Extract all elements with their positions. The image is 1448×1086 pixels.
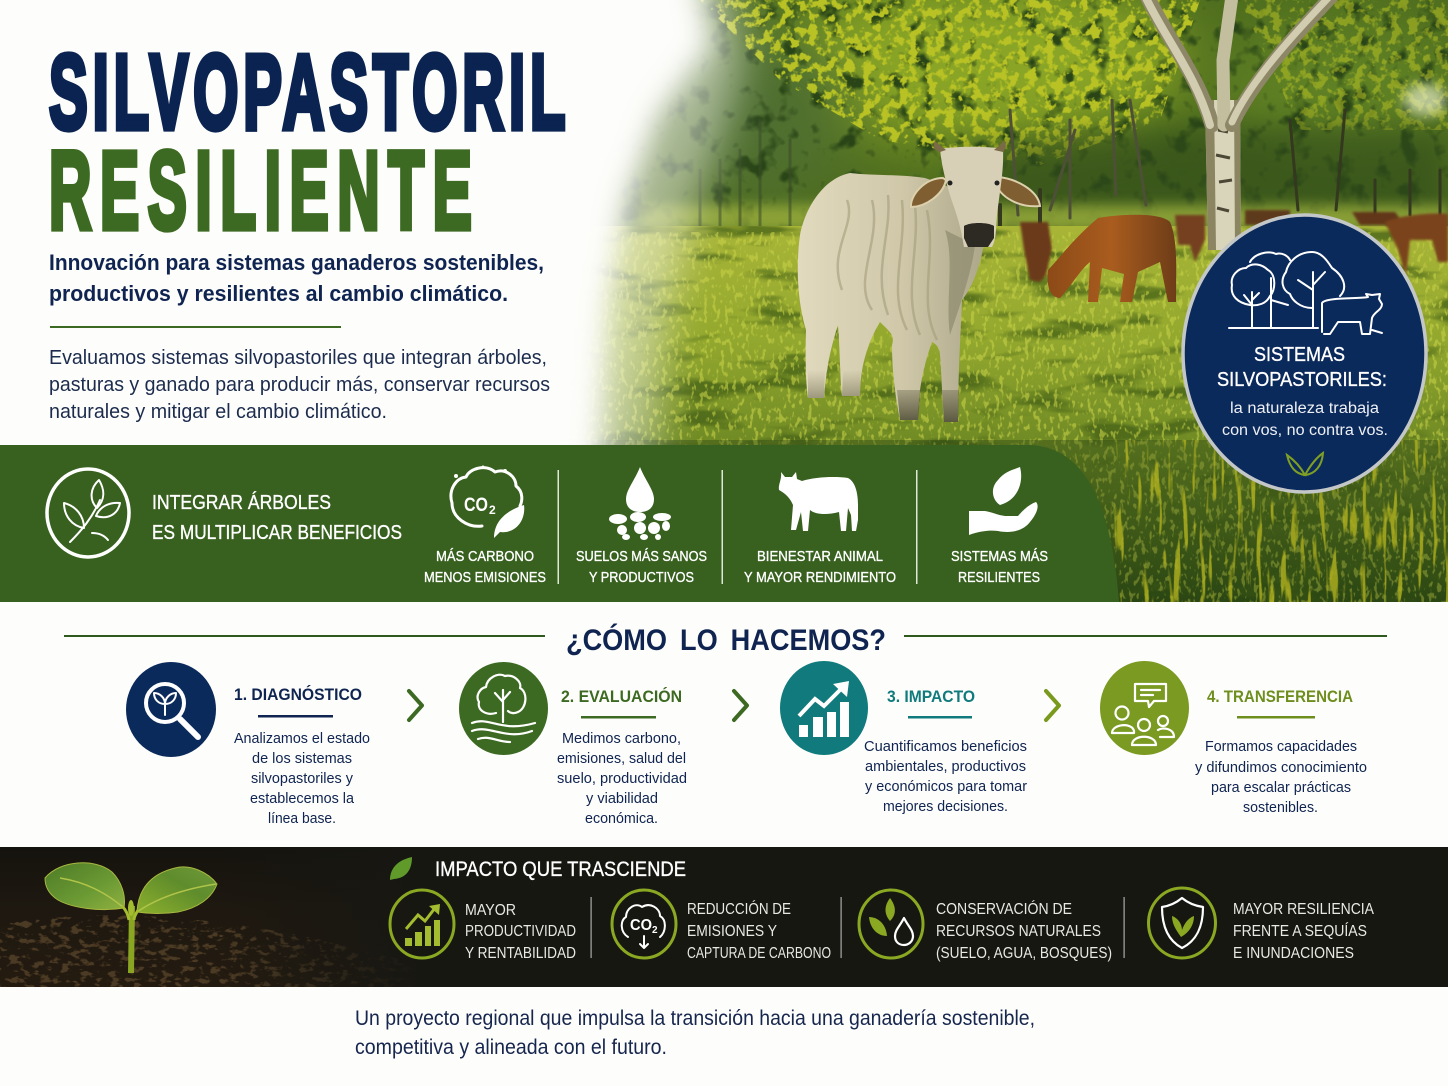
- step text: emisiones, salud del: [557, 751, 686, 767]
- benefit: soil label: SUELOS MÁS SANOS: [576, 548, 707, 565]
- band heading: ES MULTIPLICAR BENEFICIOS: [152, 522, 402, 544]
- impact 2: [612, 890, 831, 962]
- benefit: resilience label: SISTEMAS MÁS: [951, 548, 1048, 565]
- step 4: transferencia: [1100, 661, 1367, 816]
- benefit: resilience label: RESILIENTES: [958, 569, 1040, 586]
- step heading: 3. IMPACTO: [887, 687, 975, 706]
- step text: y viabilidad: [586, 791, 658, 807]
- step text: de los sistemas: [252, 751, 352, 767]
- impact 1: [390, 890, 576, 962]
- benefit: soil label: [576, 548, 707, 586]
- benefit: resilience label: [951, 548, 1048, 586]
- step text: Formamos capacidades: [1205, 739, 1357, 755]
- panel: benefits band: [0, 445, 1119, 602]
- impact text: EMISIONES Y: [687, 923, 777, 940]
- impact text: FRENTE A SEQUÍAS: [1233, 921, 1367, 940]
- impact text: REDUCCIÓN DE: [687, 899, 791, 918]
- impact text: [687, 899, 831, 962]
- icon: tree and land: [459, 662, 548, 755]
- arrow: [409, 691, 422, 720]
- intro paragraph: Evaluamos sistemas silvopastoriles que integran árboles,: [49, 347, 547, 369]
- background brown cattle: [1020, 210, 1448, 282]
- right leaf: [137, 867, 217, 914]
- title: [49, 34, 570, 252]
- icon: hand holding leaf: [969, 467, 1038, 535]
- subtitle: productivos y resilientes al cambio climático.: [49, 281, 508, 306]
- step text: [234, 731, 370, 827]
- icon: trees and cow outline: [1229, 252, 1382, 334]
- step text: [864, 739, 1027, 815]
- step text: económica.: [585, 811, 658, 827]
- sky gaps: [1403, 84, 1447, 116]
- white zebu cow: [798, 140, 1040, 422]
- impact text: MAYOR RESILIENCIA: [1233, 901, 1374, 918]
- impact text: CAPTURA DE CARBONO: [687, 945, 831, 962]
- tree canopy backdrop: [604, 0, 1448, 226]
- badge title: [1217, 344, 1387, 391]
- icon: CO2 cloud with arrow: CO: [630, 917, 652, 934]
- impact text: (SUELO, AGUA, BOSQUES): [936, 945, 1112, 962]
- step 3: impacto: [780, 661, 1027, 815]
- distant bright field band: [640, 205, 1448, 231]
- subtitle: [49, 250, 544, 306]
- title: RESILIENTE: [49, 129, 480, 252]
- step text: silvopastoriles y: [251, 771, 354, 787]
- badge tagline: [1222, 400, 1388, 439]
- icon: CO2 cloud with leaf: CO: [464, 495, 488, 516]
- icon: growth bars: [390, 890, 454, 958]
- panel: impact band: [0, 847, 1448, 987]
- step text: y difundimos conocimiento: [1195, 760, 1367, 776]
- icon: water drop over soil: [609, 467, 671, 540]
- background tree trunks: [700, 100, 1440, 236]
- icon: CO2 cloud with arrow: [612, 890, 676, 958]
- icon: magnifier with sprout: [126, 662, 216, 757]
- badge tagline: con vos, no contra vos.: [1222, 422, 1388, 439]
- closing statement: [355, 1007, 1035, 1059]
- impact text: [936, 899, 1112, 962]
- brown cow grazing: [1048, 215, 1176, 302]
- step text: mejores decisiones.: [883, 799, 1008, 815]
- section heading: como lo hacemos: ¿CÓMO LO HACEMOS?: [566, 623, 886, 657]
- badge: sistemas silvopastoriles: [1183, 215, 1426, 492]
- impact text: PRODUCTIVIDAD: [465, 923, 576, 940]
- badge tagline: la naturaleza trabaja: [1230, 400, 1379, 417]
- band heading: IMPACTO QUE TRASCIENDE: [435, 858, 686, 881]
- icon: cow: [779, 472, 858, 531]
- benefit: animal label: [744, 548, 896, 586]
- step text: [557, 731, 687, 827]
- hero photo: cattle grazing under trees: [582, 0, 1448, 602]
- intro paragraph: [49, 347, 550, 423]
- impact text: [1233, 901, 1374, 962]
- step text: y económicos para tomar: [865, 779, 1027, 795]
- icon: shield with leaf: [1148, 888, 1216, 958]
- benefit: animal label: BIENESTAR ANIMAL: [757, 548, 883, 565]
- step text: para escalar prácticas: [1211, 780, 1351, 796]
- icon: CO2 cloud with leaf: [451, 466, 524, 538]
- closing statement: competitiva y alineada con el futuro.: [355, 1036, 667, 1059]
- impact text: RECURSOS NATURALES: [936, 923, 1101, 940]
- arrow: [1046, 691, 1059, 720]
- step heading: 1. DIAGNÓSTICO: [234, 685, 362, 704]
- step text: establecemos la: [250, 791, 355, 807]
- intro paragraph: pasturas y ganado para producir más, conservar recursos: [49, 374, 550, 396]
- step text: Analizamos el estado: [234, 731, 370, 747]
- head: [940, 147, 1003, 247]
- icon: people with speech bubble: [1100, 661, 1189, 755]
- impact 3: [859, 890, 1112, 962]
- step text: sostenibles.: [1243, 800, 1318, 816]
- icon: sprout: [1287, 453, 1323, 475]
- shaded understory: [960, 126, 1448, 222]
- impact 4: [1148, 888, 1374, 962]
- impact text: MAYOR: [465, 902, 516, 919]
- title: SILVOPASTORIL: [49, 34, 570, 152]
- step text: [1195, 739, 1367, 816]
- closing statement: Un proyecto regional que impulsa la transición hacia una ganadería sostenible,: [355, 1007, 1035, 1030]
- badge title: SISTEMAS: [1254, 344, 1345, 366]
- step heading: 2. EVALUACIÓN: [561, 687, 682, 706]
- step text: Medimos carbono,: [562, 731, 681, 747]
- band heading: INTEGRAR ÁRBOLES: [152, 491, 331, 514]
- subtitle: Innovación para sistemas ganaderos sostenibles,: [49, 250, 544, 275]
- right ear: [995, 177, 1040, 206]
- horns: [934, 140, 1006, 152]
- large birch tree: [1145, 0, 1332, 250]
- impact text: [465, 902, 576, 962]
- benefit: carbon label: MENOS EMISIONES: [424, 569, 546, 586]
- step text: ambientales, productivos: [865, 759, 1026, 775]
- photo: seedling in soil: [0, 862, 389, 987]
- stem: [128, 906, 135, 973]
- impact text: CONSERVACIÓN DE: [936, 899, 1072, 918]
- left leaf: [45, 863, 124, 910]
- icon: CO2 cloud with leaf: 2: [489, 503, 496, 517]
- badge title: SILVOPASTORILES:: [1217, 369, 1387, 391]
- icon: CO2 cloud with arrow: 2: [652, 925, 658, 936]
- step text: suelo, productividad: [557, 771, 687, 787]
- step text: Cuantificamos beneficios: [864, 739, 1027, 755]
- step text: línea base.: [268, 811, 336, 827]
- icon: rising bar chart: [780, 661, 868, 755]
- benefit: soil label: Y PRODUCTIVOS: [589, 569, 694, 586]
- arrow: [734, 691, 747, 720]
- icon: leaves and water drop: [859, 890, 923, 958]
- impact text: E INUNDACIONES: [1233, 945, 1354, 962]
- left ear: [911, 178, 946, 207]
- step heading: 4. TRANSFERENCIA: [1207, 687, 1353, 706]
- impact text: Y RENTABILIDAD: [465, 945, 576, 962]
- grass field: [560, 226, 1448, 602]
- icon: plant in ring: [47, 469, 129, 557]
- step 2: evaluacion: [459, 662, 687, 827]
- benefit: carbon label: MÁS CARBONO: [436, 548, 534, 565]
- benefit: carbon label: [424, 548, 546, 586]
- band heading: [152, 491, 402, 544]
- left fade to white: [560, 0, 768, 445]
- benefit: animal label: Y MAYOR RENDIMIENTO: [744, 569, 896, 586]
- intro paragraph: naturales y mitigar el cambio climático.: [49, 401, 387, 423]
- step 1: diagnostico: [126, 662, 370, 827]
